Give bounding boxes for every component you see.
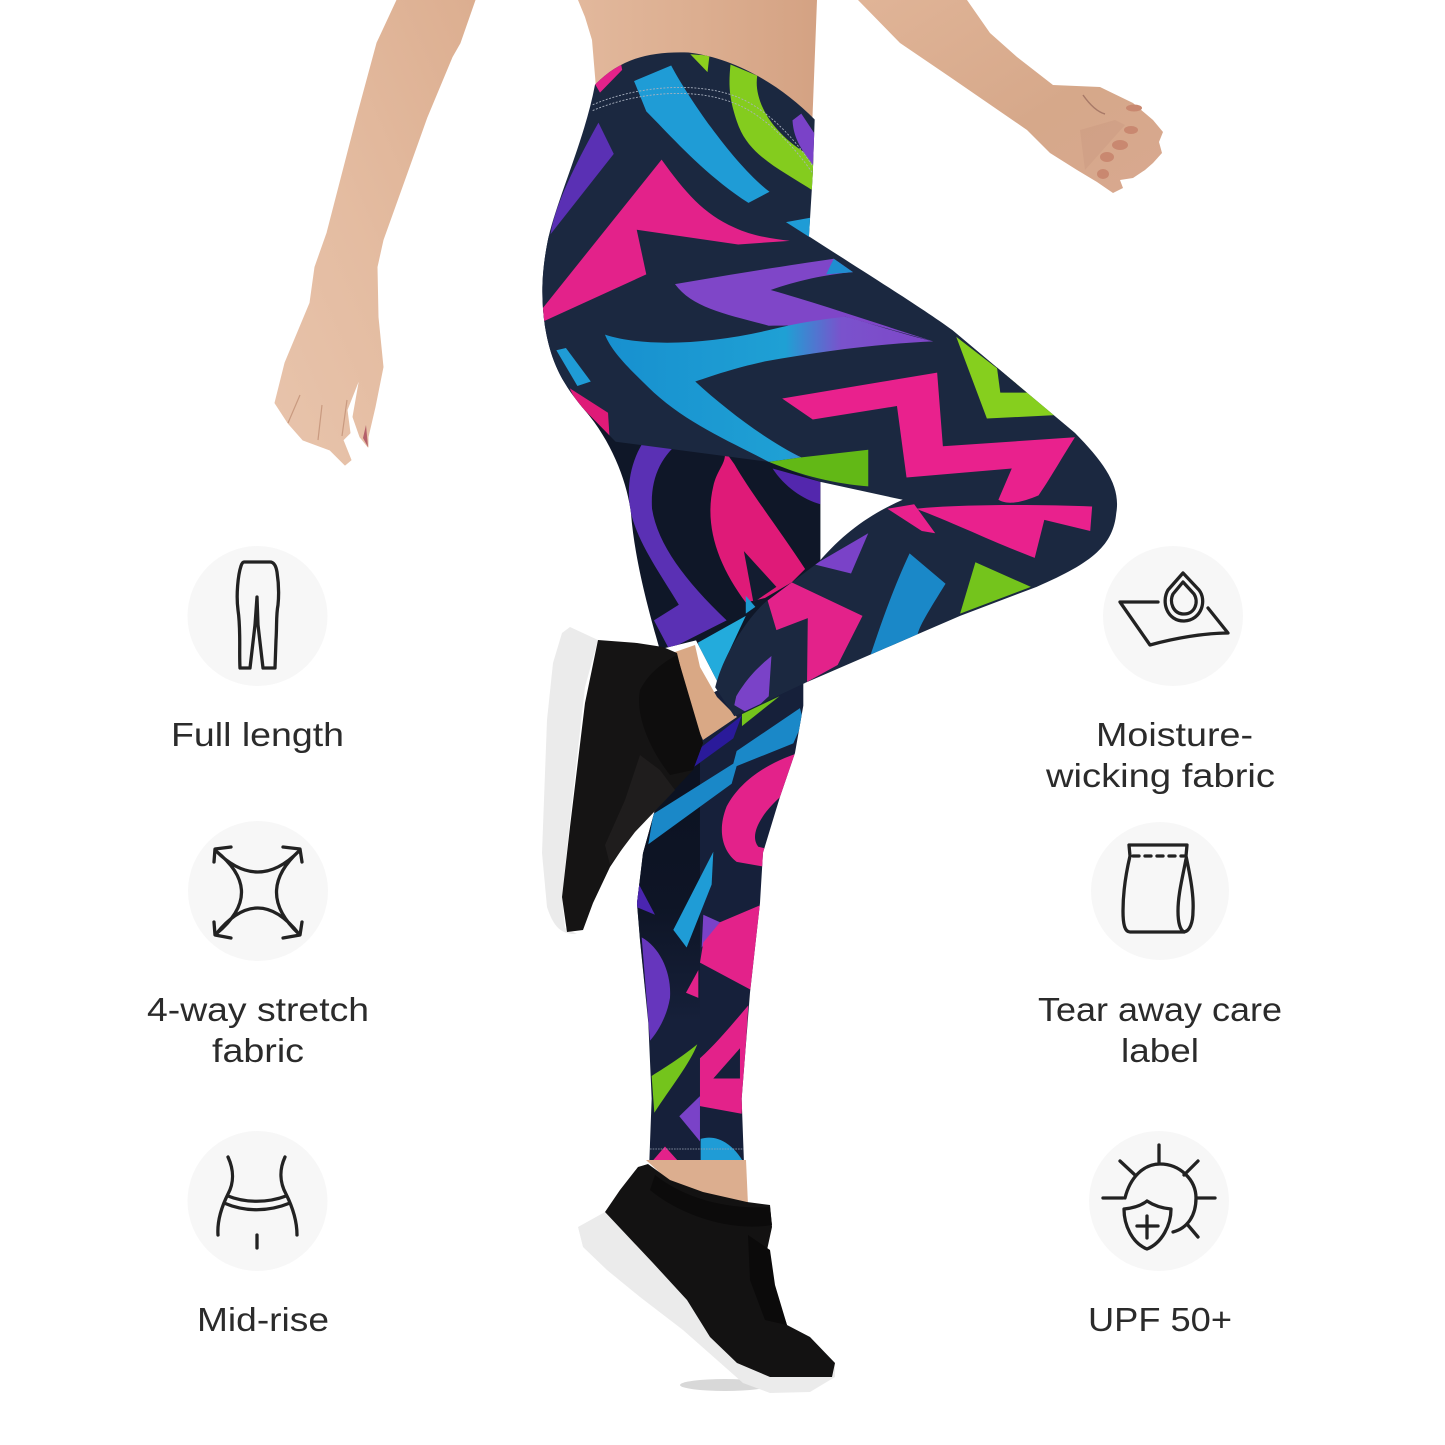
- icon: sun and shield: [1089, 1131, 1229, 1271]
- feature: UPF 50+: [1088, 1131, 1232, 1338]
- icon: stretch arrows: [188, 821, 328, 961]
- icon: label: [1091, 822, 1229, 960]
- label: stretch: 4-way stretch: [147, 991, 369, 1028]
- icon: water drop on fabric: [1103, 546, 1243, 686]
- icon: waist: [188, 1131, 328, 1271]
- label: moisture: Moisture-: [1096, 716, 1253, 753]
- standing shoe: [578, 1160, 835, 1393]
- thigh and raised calf: [542, 52, 1117, 726]
- feature: moisture-wicking fabric: [1045, 546, 1275, 794]
- icon: leggings: [188, 546, 328, 686]
- torso skin: [578, 0, 817, 130]
- label: moisture: wicking fabric: [1045, 757, 1275, 794]
- left arm: [275, 0, 475, 465]
- label: UPF: UPF 50+: [1088, 1301, 1232, 1338]
- feature: mid-rise: [188, 1131, 329, 1338]
- raised ankle skin: [675, 645, 737, 740]
- label: tear away: label: [1121, 1032, 1199, 1069]
- label: tear away: Tear away care: [1038, 991, 1282, 1028]
- feature: full length: [171, 546, 344, 753]
- label: mid-rise: Mid-rise: [197, 1301, 329, 1338]
- rear leg upper: [542, 236, 820, 714]
- raised shoe: [542, 627, 703, 934]
- photo: model wearing leggings: [275, 0, 1163, 1393]
- feature: tear away care label: [1038, 822, 1291, 1069]
- rear leg lower: [633, 650, 803, 1166]
- label: full length: Full length: [171, 716, 344, 753]
- right arm: [858, 0, 1163, 193]
- feature: 4-way stretch fabric: [147, 821, 378, 1069]
- label: stretch: fabric: [212, 1032, 304, 1069]
